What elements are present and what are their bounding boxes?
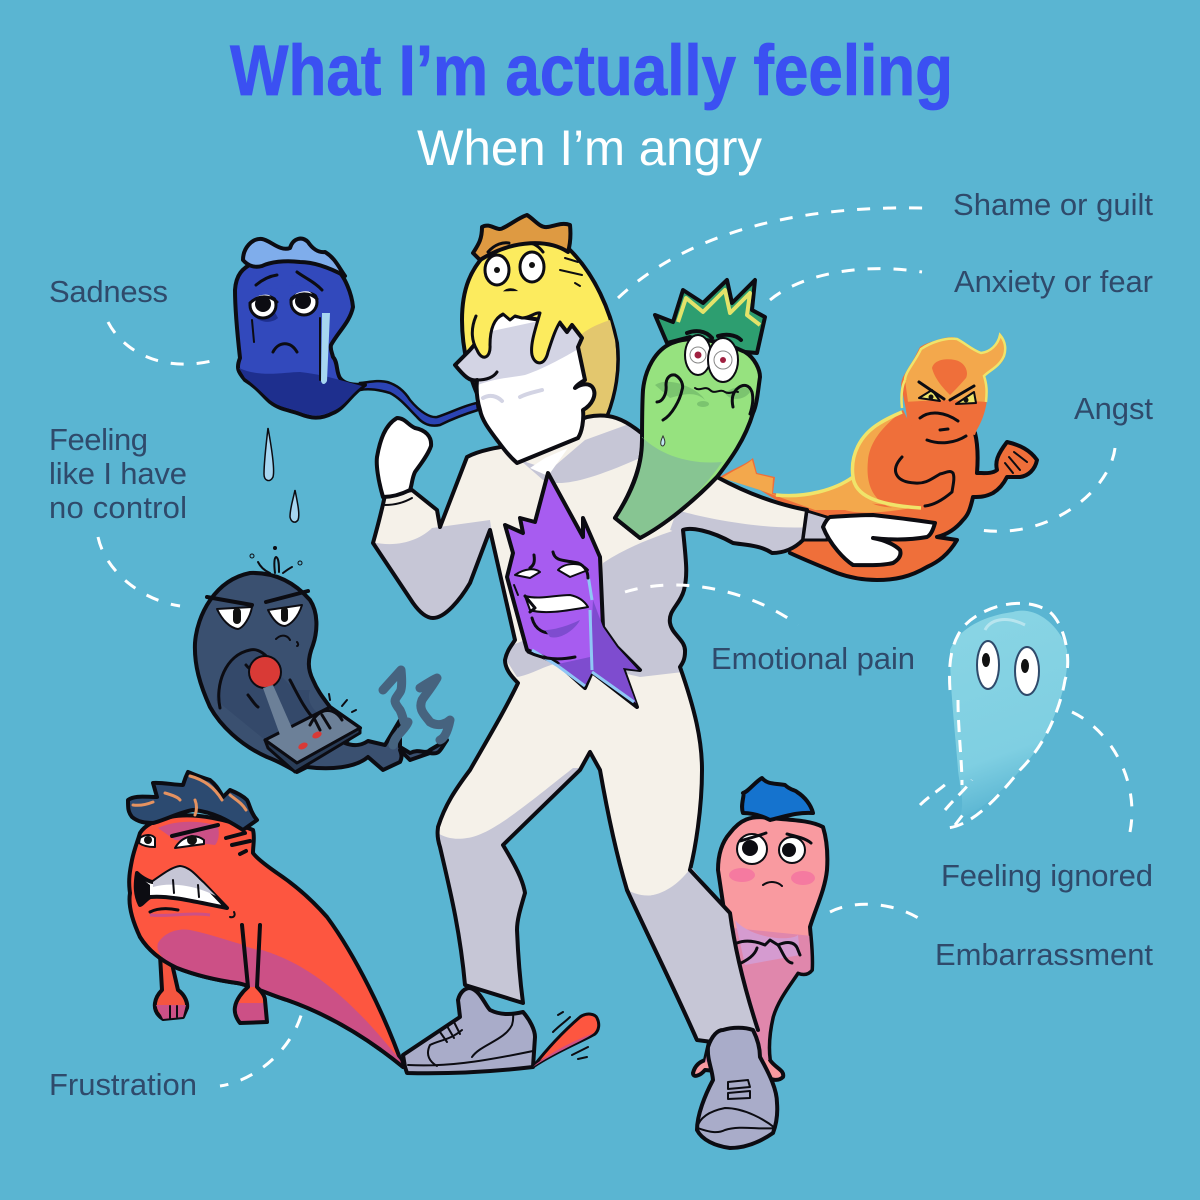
joystick base [265,707,360,763]
label: Feeling like I have no control: no control [49,490,187,525]
character: control dark blob [195,546,450,772]
shoe left [403,988,535,1073]
front leg [235,925,267,1023]
label: Shame or guilt: Shame or guilt [953,187,1153,222]
label: Shame or guilt [618,187,1153,298]
character: shame yellow egg (behind man) [462,215,618,420]
hair [243,239,345,276]
label: Sadness: Sadness [49,274,168,309]
label: Anxiety or fear [770,264,1153,300]
label: Emotional pain [625,585,915,676]
smoke [383,670,450,745]
label: Feeling ignored: Feeling ignored [941,858,1153,893]
hands [737,940,800,965]
label: Sadness [49,274,222,364]
character: sadness blue blob [235,239,478,426]
character: frustration red [128,772,403,1067]
man head [450,310,594,476]
tear drops [264,428,299,522]
main figure body [365,415,810,1050]
title: What I’m actually feeling [230,32,953,111]
man left fist [377,418,431,505]
character: ignored ghost [920,603,1068,828]
man right hand [803,511,935,565]
hair [742,778,813,820]
collar [530,448,568,476]
arms [216,652,330,740]
legs [155,955,187,1019]
eyes [217,607,252,629]
drip marks [258,557,292,573]
label: Embarrassment [830,904,1153,972]
label: Frustration [49,990,305,1102]
label: Feeling like I have no control: like I have [49,456,187,491]
face [158,822,219,845]
face [919,390,940,401]
label: Emotional pain: Emotional pain [711,641,915,676]
eyes [685,335,711,375]
red tail tip behind shoe [533,1012,599,1067]
label: Angst [980,391,1153,531]
label: Anxiety or fear: Anxiety or fear [954,264,1153,299]
label: Frustration: Frustration [49,1067,197,1102]
character: embarrassment pink [693,778,827,1080]
label: Angst: Angst [1074,391,1153,426]
face [250,300,278,322]
face [737,834,767,864]
label: Feeling like I have no control [49,422,187,606]
subtitle: When I’m angry [417,120,762,176]
character: anxiety green [615,280,765,538]
hair [473,215,570,260]
hair [655,280,765,353]
label: Embarrassment: Embarrassment [935,937,1153,972]
label: Feeling like I have no control: Feeling [49,422,148,457]
label: Feeling ignored [941,712,1153,893]
hair [128,772,257,830]
character: angst orange flame [720,333,1037,580]
man right leg overlap and shoe [627,868,777,1148]
tail [360,381,478,426]
character: emotional pain purple [505,473,640,707]
yellow face [485,255,509,285]
flame hair [905,335,1005,402]
yellow drips over the head [471,290,572,363]
